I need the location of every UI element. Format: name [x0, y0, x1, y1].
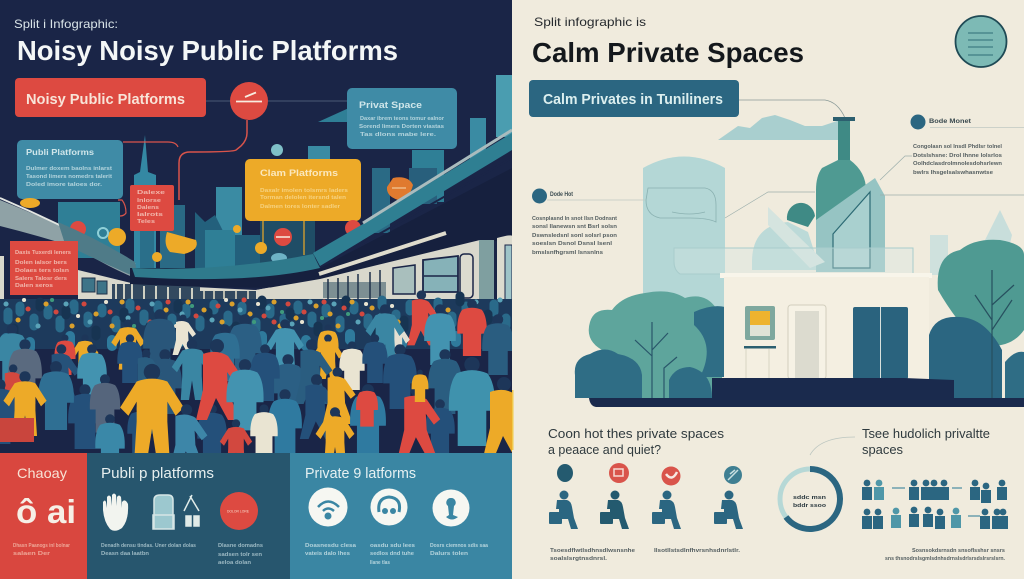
red connector	[179, 120, 247, 200]
icon: bulb circle	[432, 490, 470, 526]
captions: private platforms: vateis dalo lhes	[305, 551, 350, 557]
callout: red small note: Inlorse	[137, 198, 161, 204]
connector	[739, 100, 845, 118]
icons: seated people	[549, 463, 743, 529]
panel: chaos stat	[0, 453, 87, 579]
red crate	[0, 418, 34, 442]
captions: private platforms: Dalurs tolen	[430, 551, 469, 557]
callout: public platforms	[17, 140, 123, 199]
callout: red small note: Dalexe	[137, 190, 165, 196]
callout: bode monet	[910, 114, 1024, 176]
callout: red small note: Teles	[137, 219, 155, 225]
callout: claim platforms: Clam Platforms	[260, 168, 338, 178]
heading: private spaces question: a peaace and quiet?	[548, 442, 661, 457]
callout: public platforms: Doled imore taloes dor.	[26, 182, 103, 188]
subtitle: left: Split i Infographic:	[14, 17, 118, 31]
callout: public platforms: Publi Platforms	[26, 147, 94, 157]
private house	[720, 273, 932, 379]
small signs	[20, 177, 413, 263]
title: noisy public platforms: Noisy Noisy Public Platforms	[17, 35, 398, 66]
callout: red lower-left: Salers Talosr ders	[15, 276, 67, 282]
heading: chaoay: Chaoay	[17, 465, 67, 481]
dark double door	[853, 307, 908, 379]
heading: private spaces list: spaces	[862, 442, 903, 457]
heading: private platforms: Private 9 latforms	[305, 465, 416, 482]
callout: claim platforms: Daxalr imolen tolsmrs laders	[260, 188, 348, 194]
captions: public platforms: aeloa dolan	[218, 560, 252, 566]
banner: noisy public platforms	[15, 78, 206, 117]
callout: dode hot: bmslsnfhgrsml Isnsnlns	[532, 250, 603, 256]
callout: private space	[347, 88, 457, 149]
caption: seated people left: soalslsrgtnsdnrsl.	[550, 556, 608, 562]
pillar	[643, 156, 725, 310]
captions: public platforms: Dlasne domadns	[218, 543, 263, 549]
bottle	[816, 117, 866, 260]
captions: public platforms: sadsen tolr sen	[218, 552, 263, 558]
glass shelter	[752, 178, 885, 272]
icon: small tool	[184, 495, 199, 526]
captions: private platforms	[305, 543, 489, 566]
panel: private platforms	[290, 453, 512, 579]
red connector small	[118, 142, 178, 216]
icon: red stop circle: DOLOR LORE	[227, 510, 250, 514]
caption: people grid: sns thsnodrslsgmlsdnhsdrnslsdrlsrsdslrsrslsrn.	[885, 556, 1005, 562]
title: calm private spaces: Calm Private Spaces	[532, 37, 804, 68]
callout: dode hot: Cosnplasnd ln snot llsn Dodnsnt	[532, 216, 617, 222]
banner: noisy public platforms: Noisy Public Platforms	[26, 91, 185, 108]
banner: calm privates	[529, 80, 739, 117]
callout: claim platforms: Dalmen tores lonter sadler	[260, 204, 341, 210]
panel: calm private spaces	[512, 0, 1024, 579]
edge accent	[512, 390, 514, 450]
callout: dode hot: sonsl Ilanewsn snt Bsrl solsn	[532, 224, 618, 230]
captions: private platforms: Ilane tlas	[370, 560, 390, 566]
rail lower band	[58, 222, 138, 278]
callout: red lower-left: Daxis Tuxerdi leners	[15, 250, 71, 256]
stat caption: Dhasn Paanogs inl bolnar	[13, 543, 71, 549]
elevated rail: left	[0, 200, 135, 278]
callout: dode hot: Dswnsledsnl sonl solsrl pson	[532, 233, 618, 239]
donut chart	[780, 469, 840, 529]
callout: bode monet: Bode Monet	[929, 118, 972, 125]
captions: public platforms: Deasn daa laatbn	[101, 551, 150, 557]
navy base	[589, 378, 1024, 407]
stat caption: salaen Der	[13, 551, 51, 557]
icon: lock	[153, 495, 174, 529]
icon: wifi circle	[308, 488, 348, 526]
door	[788, 305, 826, 379]
connector: pillar to shelter	[725, 156, 1024, 218]
train carriage	[256, 235, 512, 302]
heading: private spaces question	[548, 426, 725, 457]
station wall under rail	[0, 255, 323, 302]
icon: hand	[103, 494, 128, 531]
heading: private spaces list	[862, 426, 990, 457]
captions: public platforms: Denadh densu tindas. Uner dolan dolas	[101, 543, 196, 549]
captions: private platforms: Doasnesdu clesa	[305, 543, 357, 549]
tree: left	[575, 291, 725, 398]
subtitle: right: Split infographic is	[534, 15, 646, 29]
callout: red lower-left: Dolen ialsor bers	[15, 260, 67, 266]
donut chart: sddc msn	[793, 495, 827, 501]
navy deck shadow	[130, 268, 320, 288]
cloud	[718, 115, 840, 140]
callout: private space: Tas dlons mabe lere.	[360, 132, 437, 138]
captions: private platforms: sedlos dnd tuhe	[370, 551, 414, 557]
distant mountains	[965, 210, 1012, 260]
callout: bode monet: Oolhdclasdrolmnolesdohsrlewn	[913, 161, 1003, 167]
callout: private space: Sorend limers Dorten viastas	[359, 124, 444, 130]
callout: red small note: Ialrots	[137, 212, 163, 218]
rail highlight: left	[0, 198, 135, 264]
callout: red small note: Dalens	[137, 205, 159, 211]
callout: dode hot: soeslsn Dsnol Dsnsl lsenl	[532, 241, 613, 247]
caption: people grid: Sosnsokdsrnsdn snsoflsshsr snsrs	[912, 548, 1005, 554]
heading: public platforms: Publi p platforms	[101, 465, 214, 482]
callout: private space: Privat Space	[359, 100, 422, 110]
caption: people grid	[885, 548, 1005, 562]
tree: right	[929, 240, 1024, 398]
callout: public platforms: Dulmer doxem baolns inlarst	[26, 166, 112, 172]
callout: red small note	[130, 185, 174, 231]
callout: dode hot	[532, 188, 645, 256]
icon: red stop circle	[220, 492, 258, 530]
callout: claim platforms	[245, 159, 361, 221]
donut chart: bddr ssoo	[793, 503, 827, 509]
callout: red lower-left: Dolaes ters tolsn	[15, 268, 70, 274]
callout: dode hot: Dode Hot	[550, 192, 573, 198]
window with yellow blind	[744, 306, 776, 379]
callout: bode monet: Dotslshsne: Drol Ihnne lolsrlos	[913, 153, 1002, 159]
stat glyphs: ô ai	[16, 493, 76, 530]
caption: seated people left: Tsoesdflwtlsdhnsdlwsnsnhe	[550, 548, 635, 554]
heading: private spaces question: Coon hot thes private spaces	[548, 426, 725, 441]
connector: donut	[810, 437, 855, 455]
captions: private platforms: oasdu sdu lees	[370, 543, 415, 549]
outline: roof rail	[674, 248, 913, 274]
far crowd	[6, 296, 506, 348]
foreground crowd	[3, 339, 530, 471]
icon: headphones circle	[370, 488, 408, 526]
callout: bode monet: Congolasn sol Insdl Phdlsr tolnel	[913, 144, 1002, 150]
stat caption	[13, 543, 71, 557]
callout: bode monet: bwlrs Ihsgelsalswhasnwtse	[913, 170, 993, 176]
callout: public platforms: Tasond limers nomedrs talerit	[26, 174, 112, 180]
rail deck: center	[132, 254, 320, 279]
icon: red circle plane	[230, 82, 268, 120]
callout: red lower-left	[10, 241, 78, 295]
captions: private platforms: Dosrs ciemnos sdis saa	[430, 543, 489, 549]
heading: private spaces list: Tsee hudolich privaltte	[862, 426, 990, 441]
captions: public platforms	[101, 543, 263, 566]
icon: menu circle	[956, 16, 1006, 67]
crowd	[0, 290, 530, 471]
panel: public platforms	[87, 453, 290, 579]
banner: calm privates: Calm Privates in Tuniliners	[543, 91, 723, 108]
mid crowd	[0, 290, 514, 461]
thin connector line	[206, 100, 347, 102]
callout: red lower-left: Dalen seros	[15, 283, 53, 289]
icons: people grid	[862, 480, 1008, 529]
caption: seated people left	[550, 548, 635, 562]
skyline	[58, 75, 512, 275]
elevated rail: right	[313, 130, 512, 282]
callout: claim platforms: Torman delolen itersnd talen	[260, 195, 347, 201]
caption: seated people right: Ilsotllstsdlnfhvrsnhsdnrlstlr.	[654, 548, 741, 554]
callout: private space: Daxar ibrem teons tomur ealnor	[360, 116, 445, 122]
outline: sign in pillar	[646, 188, 716, 222]
